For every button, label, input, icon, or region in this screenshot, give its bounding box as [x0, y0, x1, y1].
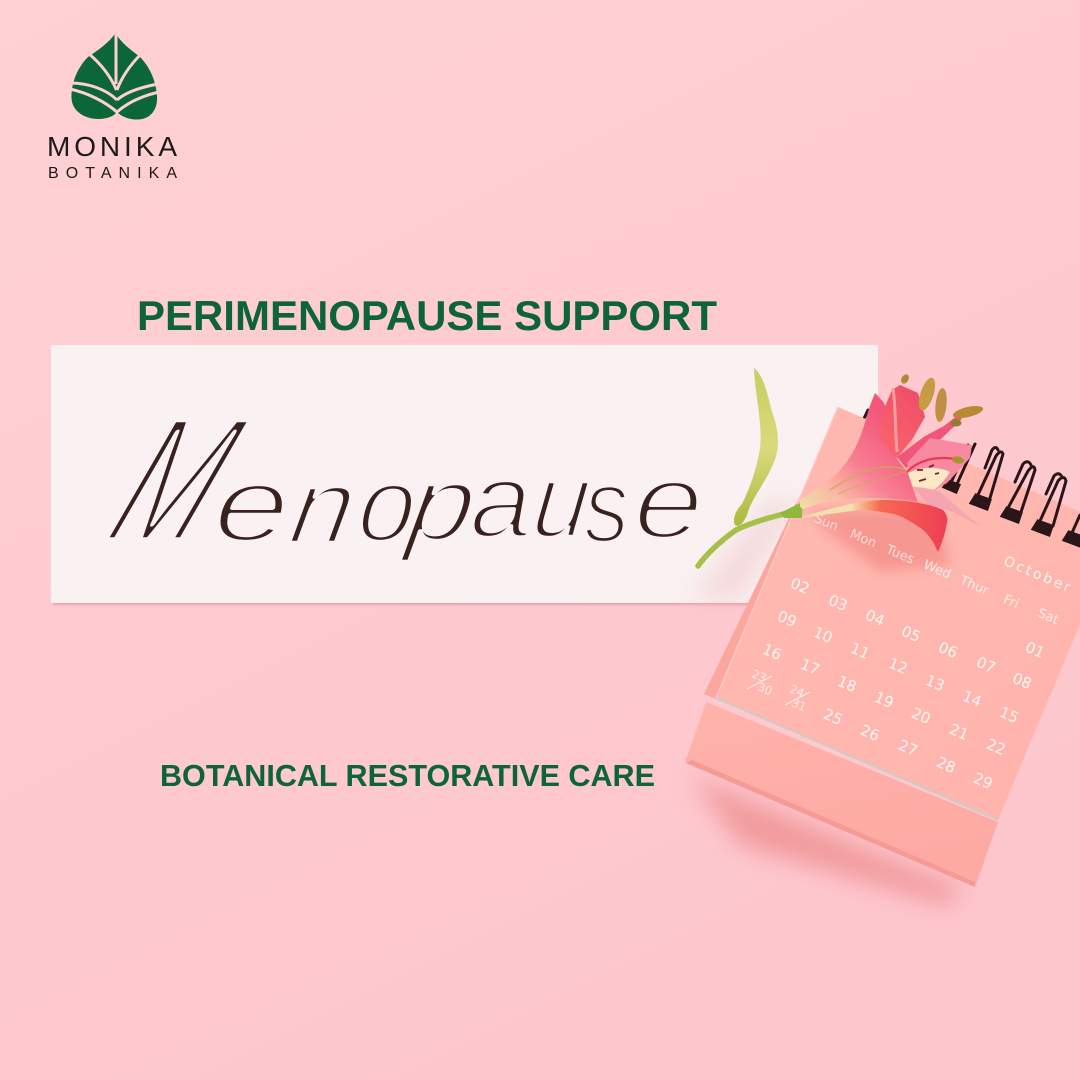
- handwritten word: Menopause: a: [461, 442, 545, 560]
- calendar dates: 21: [947, 720, 971, 744]
- upper back petal: [875, 385, 925, 458]
- calendar dates: 19: [872, 688, 896, 712]
- logo: Monika Botanika: [47, 30, 177, 182]
- icon: green leaf: [70, 30, 159, 120]
- calendar dates: 23: [750, 667, 768, 685]
- handwritten word: Menopause: u: [518, 442, 608, 560]
- front spiral rings: [944, 444, 1080, 546]
- handwritten word: Menopause: [74, 381, 718, 580]
- calendar dates: 15: [997, 703, 1021, 727]
- calendar dates: 12: [886, 654, 910, 678]
- weekday labels: Tues: [883, 542, 916, 568]
- shadow on paper: [690, 500, 800, 603]
- calendar dates: 16: [760, 640, 784, 664]
- weekday labels: Wed: [921, 558, 953, 582]
- right pale petal: [907, 438, 972, 491]
- handwritten word: Menopause: e: [200, 446, 306, 564]
- calendar dates: 27: [896, 736, 920, 760]
- handwritten word: Menopause: o: [345, 446, 433, 564]
- calendar dates: 04: [863, 606, 887, 630]
- paper note: [51, 345, 878, 603]
- weekday labels: Mon: [847, 527, 879, 551]
- calendar dates: 26: [858, 721, 882, 745]
- main pink petal: [800, 393, 918, 510]
- calendar dates: 13: [923, 671, 947, 695]
- flower base: [795, 504, 802, 518]
- calendar page: [716, 407, 1080, 820]
- calendar dates: 25: [821, 705, 845, 729]
- handwritten word: Menopause: n: [273, 447, 378, 566]
- back page sliver: [704, 495, 800, 700]
- calendar dates: 02: [788, 574, 812, 598]
- spiral rings: [853, 410, 873, 442]
- weekday labels: Fri: [1001, 592, 1021, 612]
- calendar dates: 05: [899, 622, 923, 646]
- calendar dates: 22: [984, 735, 1008, 759]
- paper note shadow: [53, 600, 753, 605]
- red lower petal: [800, 500, 947, 552]
- lily flower: [795, 373, 984, 552]
- weekday labels: [812, 511, 1061, 628]
- calendar dates: 24: [788, 682, 806, 700]
- flower shadow on page: [810, 505, 950, 572]
- calendar dates: 11: [848, 639, 872, 663]
- handwritten word: Menopause: e: [622, 443, 718, 561]
- calendar dates: 28: [934, 753, 958, 777]
- logo wordmark: MONIKA: MONIKA: [47, 131, 177, 162]
- thin lower right petal: [913, 487, 982, 527]
- heading: Perimenopause Support: PERIMENOPAUSE SUPPORT: [137, 292, 717, 339]
- calendar dates: 03: [826, 591, 850, 615]
- anthers: [916, 376, 938, 412]
- calendar dates: 10: [811, 623, 835, 647]
- calendar dates: 18: [835, 672, 859, 696]
- weekday labels: Thur: [956, 573, 991, 599]
- month label: October: October: [1001, 553, 1075, 597]
- flower bud and stem: [698, 368, 802, 566]
- weekday labels: Sun: [812, 511, 840, 535]
- stem: [698, 510, 800, 566]
- handwritten word: Menopause: s: [579, 446, 636, 565]
- desk calendar: [685, 407, 1080, 905]
- calendar dates: 09: [775, 607, 799, 631]
- calendar dates: 06: [936, 638, 960, 662]
- calendar dates: 14: [960, 687, 984, 711]
- calendar cast shadow: [690, 775, 965, 905]
- bud: [734, 368, 778, 526]
- calendar dates: 01: [1023, 638, 1047, 662]
- filament: [897, 415, 962, 468]
- calendar base: [685, 702, 998, 887]
- calendar dates: [747, 574, 1047, 793]
- calendar dates: 31: [790, 696, 808, 714]
- handwritten word: Menopause: p: [391, 445, 498, 563]
- calendar dates: 30: [756, 680, 774, 698]
- weekday labels: Sat: [1035, 606, 1061, 628]
- calendar dates: 29: [971, 769, 995, 793]
- calendar dates: 20: [909, 704, 933, 728]
- calendar dates: 08: [1010, 669, 1034, 693]
- calendar dates: 17: [798, 655, 822, 679]
- logo wordmark: BOTANIKA: BOTANIKA: [48, 165, 177, 182]
- handwritten word: Menopause: M: [74, 381, 282, 580]
- subheading: Botanical Restorative Care: BOTANICAL RESTORATIVE CARE: [160, 759, 655, 793]
- calendar dates: 07: [974, 653, 998, 677]
